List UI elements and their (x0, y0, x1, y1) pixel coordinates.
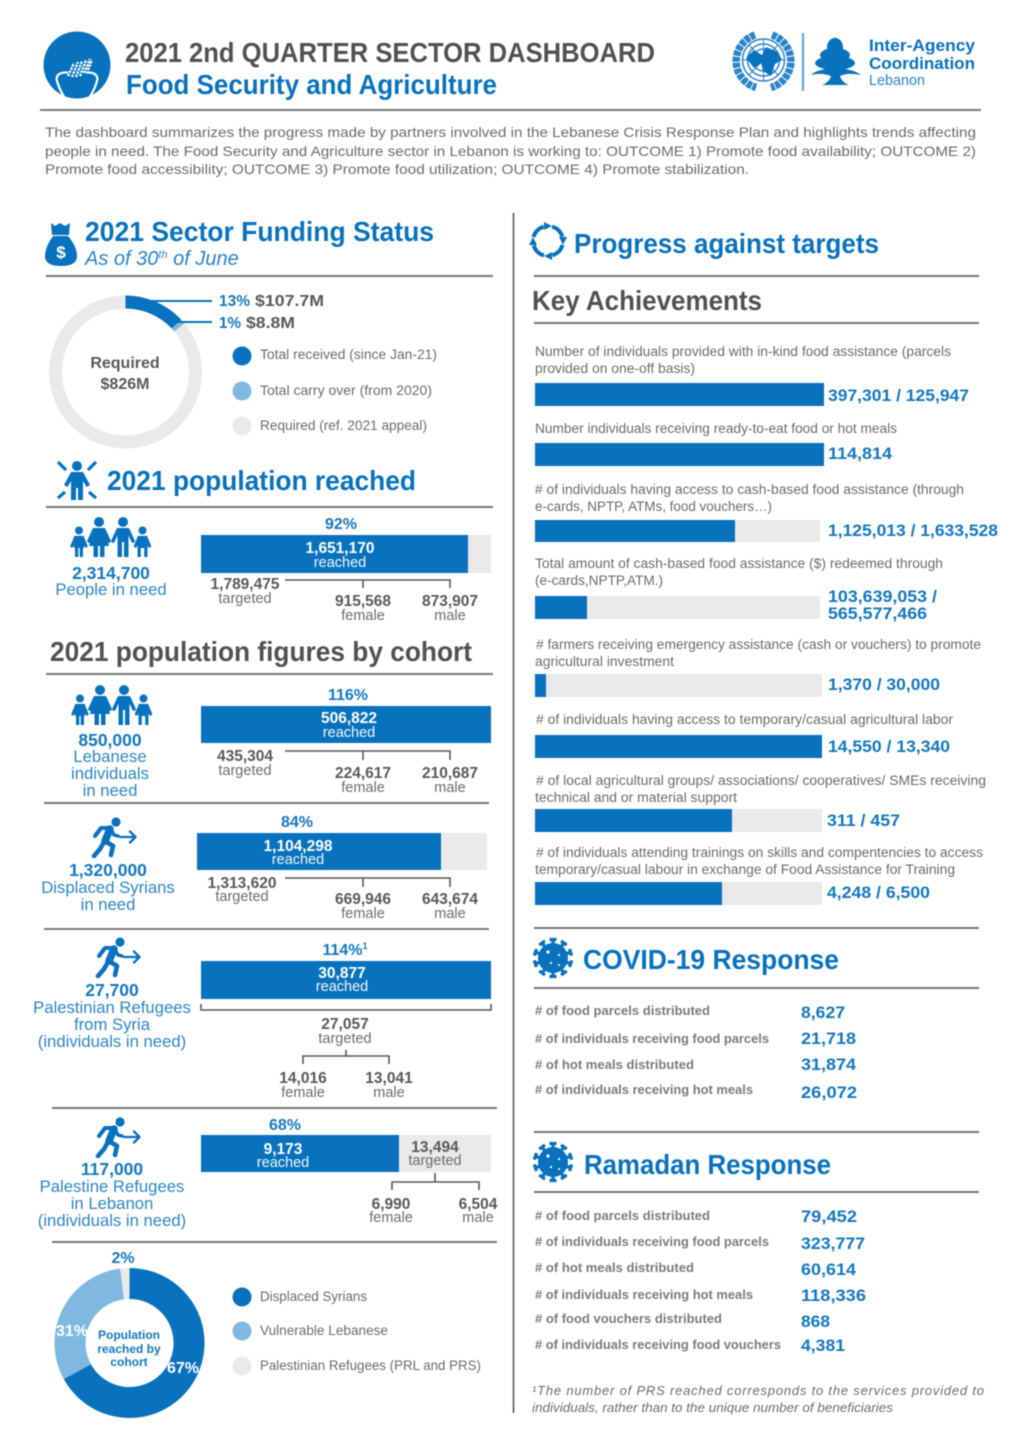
bar: population reached (201, 516, 491, 573)
breakdown: Syrians: targeted (215, 889, 269, 905)
icon: cedar tree (811, 37, 861, 85)
people in need: 2,314,700 (72, 563, 150, 583)
Lebanese in need (71, 730, 149, 800)
Ramadan values (801, 1207, 866, 1355)
PRL in need: in Lebanon (71, 1194, 153, 1213)
achievement: in-kind food assistance (535, 344, 969, 406)
PRS in need: from Syria (74, 1015, 151, 1034)
PRL in need: 117,000 (81, 1159, 143, 1179)
achievement: farmers (535, 637, 981, 697)
achievement: cash redeemed (535, 556, 943, 623)
cohort: Palestinian Refugees from Syria (33, 937, 491, 1101)
Ramadan labels: # of food vouchers distributed (535, 1311, 722, 1326)
heading: progress: Progress against targets (574, 228, 879, 259)
achievement: trainings: # of individuals attending trainings on skills and compentencies to access (536, 845, 983, 860)
divider: logo (802, 33, 804, 91)
bar: PRL (201, 1117, 491, 1172)
cohort donut chart (56, 1250, 199, 1403)
achievement: hot meals: Number individuals receiving ready-to-eat food or hot meals (535, 421, 897, 436)
funding legend (232, 346, 437, 436)
Syrians in need (41, 860, 175, 914)
COVID labels: # of hot meals distributed (535, 1057, 694, 1072)
bar: PRL: 9,173 (264, 1141, 303, 1158)
bar: Lebanese: 116% (328, 687, 368, 704)
heading: figures by cohort: 2021 population figures by cohort (50, 636, 472, 667)
heading: COVID-19: COVID-19 Response (583, 944, 839, 975)
targeted breakdown: 1,789,475 (211, 576, 280, 593)
cohort donut chart: 2% (111, 1250, 135, 1267)
achievement: farmers: # farmers receiving emergency assistance (cash or vouchers) to promote (536, 637, 981, 652)
icon: progress arrows (529, 222, 567, 260)
icon: virus COVID (534, 940, 572, 976)
Ramadan values: 60,614 (801, 1260, 857, 1279)
Ramadan values: 79,452 (801, 1207, 857, 1226)
funding values: $8.8M (246, 315, 295, 332)
breakdown: PRL: male (462, 1210, 494, 1226)
COVID values: 21,718 (801, 1029, 856, 1048)
heading: key achievements: Key Achievements (532, 285, 762, 316)
breakdown: Lebanese: targeted (218, 763, 272, 779)
Syrians in need: in need (81, 895, 135, 914)
PRL in need: Palestine Refugees (40, 1177, 184, 1196)
breakdown: Lebanese: 435,304 (217, 748, 273, 765)
funding values (219, 293, 324, 332)
breakdown: PRS (201, 1004, 491, 1101)
bar: PRS: 1 (363, 941, 368, 951)
achievement: local groups (535, 773, 986, 832)
intro text: people in need. The Food Security and Agriculture sector in Lebanon is working to: OUTCOME 1) Promote food availability; OUTCOME 2) (45, 143, 976, 159)
title: 2021 2nd QUARTER SECTOR DASHBOARD (125, 37, 655, 68)
breakdown: Lebanese: 210,687 (422, 765, 478, 782)
heading: population reached: 2021 population reached (107, 465, 416, 496)
icon: runner PRL (98, 1117, 140, 1156)
panel: COVID-19 response (534, 940, 979, 1102)
heading: funding: 2021 Sector Funding Status (85, 216, 434, 247)
achievement: cash-based access: e-cards, NPTP, ATMs, food vouchers…) (535, 499, 772, 514)
intro text (45, 124, 976, 177)
bar: PRS: 30,877 (318, 965, 366, 982)
bar: Syrians: reached (272, 852, 324, 868)
breakdown: Syrians: 643,674 (422, 891, 478, 908)
achievement: hot meals: 114,814 (828, 444, 893, 463)
cohort legend: Vulnerable Lebanese (260, 1323, 388, 1338)
achievement: agricultural labor: 14,550 / 13,340 (828, 737, 950, 756)
intro text: Promote food accessibility; OUTCOME 3) Promote food utilization; OUTCOME 4) Promote stabilization. (45, 161, 749, 177)
bar: PRL: 68% (269, 1117, 301, 1134)
funding values: 13% (219, 293, 250, 310)
bar: PRS: reached (316, 979, 368, 995)
bar: Syrians: 84% (281, 814, 313, 831)
funding legend: Total received (since Jan-21) (260, 347, 437, 362)
Lebanese in need: individuals (71, 764, 149, 783)
PRS in need: Palestinian Refugees (33, 998, 191, 1017)
Ramadan values: 868 (801, 1312, 830, 1331)
bar: PRS (201, 941, 491, 999)
COVID labels: # of food parcels distributed (535, 1003, 710, 1018)
bar: PRL: targeted (408, 1153, 462, 1169)
breakdown: Lebanese (217, 748, 478, 796)
achievement: cash redeemed: 565,577,466 (828, 604, 927, 623)
panel: population reached (46, 461, 493, 624)
header (44, 32, 976, 104)
achievement: trainings: 4,248 / 6,500 (827, 883, 930, 902)
Ramadan labels: # of individuals receiving food vouchers (535, 1337, 781, 1352)
breakdown: PRS: 14,016 (279, 1070, 327, 1087)
Ramadan labels: # of individuals receiving food parcels (535, 1234, 769, 1249)
breakdown: PRS: male (373, 1085, 405, 1101)
COVID values: 26,072 (801, 1083, 857, 1102)
logo text: Lebanon (869, 72, 925, 89)
Ramadan labels: # of food parcels distributed (535, 1208, 710, 1223)
breakdown: Syrians: 1,313,620 (208, 875, 276, 892)
Ramadan labels (535, 1208, 781, 1352)
achievement: trainings: temporary/casual labour in exchange of Food Assistance for Training (535, 862, 955, 877)
heading: funding: As of 30 (85, 248, 158, 270)
breakdown: Lebanese: male (434, 780, 466, 796)
PRS in need: (individuals in need) (38, 1032, 186, 1051)
icon: family Lebanese (73, 685, 150, 725)
funding legend: Total carry over (from 2020) (260, 383, 432, 398)
icon: money bag: $ (56, 243, 66, 262)
breakdown: Syrians: 669,946 (335, 891, 391, 908)
icon: virus Ramadan (534, 1144, 572, 1180)
achievement: in-kind food assistance: provided on one-off basis) (535, 361, 695, 376)
cohort: Palestine Refugees in Lebanon (38, 1117, 498, 1230)
bar: Lebanese (201, 687, 491, 743)
breakdown: Syrians: male (434, 906, 466, 922)
breakdown: PRS: female (281, 1085, 325, 1101)
PRL in need (38, 1159, 186, 1230)
panel: progress against targets (529, 222, 998, 905)
Ramadan values: 118,336 (801, 1286, 866, 1305)
cohort legend: Displaced Syrians (260, 1289, 367, 1304)
icon: UN emblem (736, 35, 791, 88)
cohort legend: Palestinian Refugees (PRL and PRS) (260, 1358, 481, 1373)
achievement: agricultural labor (535, 712, 954, 758)
achievement: cash-based access: 1,125,013 / 1,633,528 (828, 521, 998, 540)
breakdown: PRL: 6,990 (372, 1196, 410, 1213)
Syrians in need: 1,320,000 (69, 860, 147, 880)
COVID labels (535, 1003, 769, 1097)
funding values: $107.7M (255, 293, 324, 310)
Ramadan values: 4,381 (801, 1336, 845, 1355)
breakdown: Syrians (208, 875, 478, 922)
footnote: ¹The number of PRS reached corresponds to the services provided to (532, 1383, 984, 1398)
bar: PRS: 114% (322, 942, 363, 959)
funding donut chart: $826M (101, 376, 149, 393)
breakdown: PRS: targeted (318, 1031, 372, 1047)
bar: population reached: reached (314, 555, 366, 571)
icon: runner Syrians (94, 817, 136, 856)
heading: funding (84, 216, 434, 270)
footnote (532, 1383, 984, 1415)
cohort donut chart: reached by (97, 1342, 161, 1356)
heading: Ramadan: Ramadan Response (584, 1149, 831, 1180)
achievement: cash redeemed: Total amount of cash-based food assistance ($) redeemed through (535, 556, 943, 571)
bar: Syrians: 1,104,298 (264, 838, 333, 855)
bar: Lebanese: 506,822 (321, 710, 377, 727)
cohort legend (232, 1288, 481, 1376)
funding legend: Required (ref. 2021 appeal) (260, 418, 427, 433)
breakdown: PRL: 6,504 (459, 1196, 498, 1213)
heading: funding: th (158, 249, 168, 261)
cohort: Displaced Syrians (41, 814, 487, 922)
Ramadan labels: # of individuals receiving hot meals (535, 1287, 753, 1302)
Ramadan values: 323,777 (801, 1234, 865, 1253)
people in need (55, 563, 167, 599)
cohort donut chart: Population (98, 1328, 160, 1342)
breakdown: Syrians: female (341, 906, 385, 922)
achievement: local groups: technical and or material support (535, 790, 737, 805)
targeted breakdown: female (341, 608, 385, 624)
achievement: cash redeemed: (e-cards,NPTP,ATM.) (535, 573, 663, 588)
achievement: agricultural labor: # of individuals having access to temporary/casual agricultural labor (536, 712, 954, 727)
breakdown: PRL (369, 1173, 498, 1226)
breakdown: PRS: 27,057 (321, 1016, 369, 1033)
targeted breakdown (211, 576, 478, 624)
funding values: 1% (219, 315, 241, 332)
achievement: trainings (535, 845, 983, 905)
breakdown: Lebanese: female (341, 780, 385, 796)
bar: Lebanese: reached (323, 725, 375, 741)
funding donut chart (56, 301, 212, 442)
Lebanese in need: 850,000 (78, 730, 142, 750)
bar: Syrians (197, 814, 487, 870)
logo text (869, 36, 976, 89)
targeted breakdown: 873,907 (422, 593, 478, 610)
panel: funding status (45, 216, 493, 442)
cohort donut chart: cohort (110, 1355, 148, 1369)
panel: Ramadan response (534, 1144, 979, 1355)
title: Food Security and Agriculture (126, 69, 497, 100)
achievement: hot meals (535, 421, 897, 466)
icon: family (72, 517, 150, 557)
achievement: cash-based access (535, 482, 998, 542)
cohort donut chart: 31% (56, 1323, 88, 1340)
achievement: local groups: # of local agricultural groups/ associations/ cooperatives/ SMEs receiving (536, 773, 986, 788)
COVID values: 8,627 (801, 1003, 845, 1022)
intro text: The dashboard summarizes the progress made by partners involved in the Lebanese Crisis Response Plan and highlights trends affecting (45, 124, 976, 140)
achievement: farmers: 1,370 / 30,000 (828, 675, 940, 694)
targeted breakdown: 915,568 (335, 593, 391, 610)
PRS in need: 27,700 (85, 980, 139, 1000)
icon: money bag (45, 223, 77, 266)
breakdown: PRS: 13,041 (365, 1070, 413, 1087)
breakdown: PRL: female (369, 1210, 413, 1226)
cohort donut chart: 67% (167, 1360, 199, 1377)
achievement: in-kind food assistance: Number of individuals provided with in-kind food assistance (parcels (535, 344, 951, 359)
achievement: farmers: agricultural investment (535, 654, 674, 669)
PRL in need: (individuals in need) (38, 1211, 186, 1230)
people in need: People in need (55, 580, 167, 599)
COVID values: 31,874 (801, 1055, 857, 1074)
PRS in need (33, 980, 191, 1051)
logo text: Inter-Agency (869, 36, 976, 55)
bar: population reached: 1,651,170 (306, 540, 374, 557)
heading: funding: of June (168, 248, 239, 270)
bar: population reached: 92% (325, 516, 357, 533)
bar: PRL: 13,494 (411, 1139, 459, 1156)
bar: PRL: reached (257, 1155, 309, 1171)
cohort: Lebanese (71, 685, 491, 800)
targeted breakdown: targeted (218, 591, 272, 607)
Lebanese in need: Lebanese (73, 747, 147, 766)
Ramadan labels: # of hot meals distributed (535, 1260, 694, 1275)
logo text: Coordination (869, 54, 975, 73)
title (125, 37, 655, 100)
icon: runner PRS (98, 937, 140, 976)
Syrians in need: Displaced Syrians (41, 878, 175, 897)
achievement: cash-based access: # of individuals having access to cash-based food assistance (through (535, 482, 964, 497)
icon: person with rays (58, 461, 96, 500)
footnote: individuals, rather than to the unique number of beneficiaries (532, 1400, 894, 1415)
achievement: local groups: 311 / 457 (827, 811, 900, 830)
achievement: in-kind food assistance: 397,301 / 125,947 (828, 386, 969, 405)
COVID labels: # of individuals receiving food parcels (535, 1031, 769, 1046)
funding donut chart: Required (90, 355, 160, 372)
COVID values (801, 1003, 857, 1102)
icon: food security wheat and bowl (44, 32, 110, 104)
Lebanese in need: in need (83, 781, 137, 800)
breakdown: Lebanese: 224,617 (335, 765, 391, 782)
achievement: cash redeemed: 103,639,053 / (828, 587, 937, 606)
COVID labels: # of individuals receiving hot meals (535, 1082, 753, 1097)
targeted breakdown: male (434, 608, 466, 624)
